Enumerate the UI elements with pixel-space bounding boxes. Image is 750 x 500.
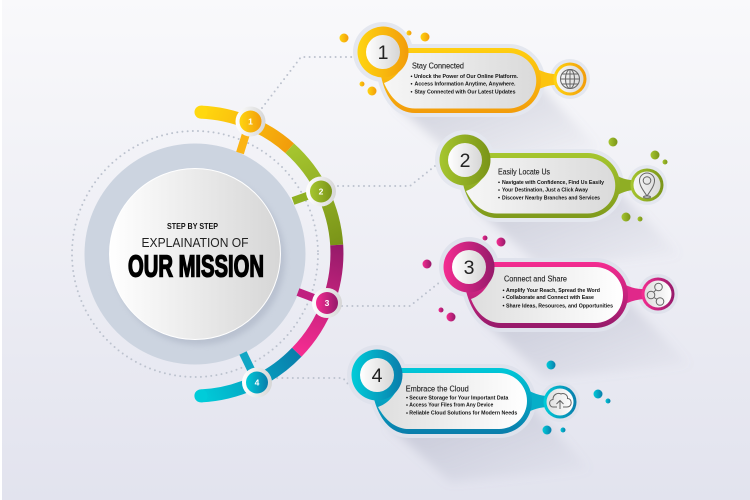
card 4 bullets: Reliable Cloud Solutions for Modern Needs bbox=[409, 411, 517, 417]
card 1 number badge: 1 bbox=[378, 42, 388, 64]
card 4 bullets: Access Your Files from Any Device bbox=[409, 403, 493, 409]
card 2 pill body bbox=[466, 158, 615, 214]
card 4 halo bbox=[347, 345, 590, 482]
icon: cloud upload bbox=[544, 386, 576, 418]
card 1 number badge bbox=[358, 26, 408, 78]
arc badge 3: 3 bbox=[325, 298, 330, 308]
icon: share bbox=[642, 278, 674, 310]
card 1 title: Stay Connected bbox=[412, 62, 464, 71]
card 1 bullets bbox=[411, 74, 518, 96]
card 3 halo bbox=[439, 237, 690, 378]
arc badge 4: 4 bbox=[255, 378, 260, 388]
card 2 number badge: 2 bbox=[460, 150, 470, 172]
card 2 title: Easily Locate Us bbox=[498, 168, 550, 177]
card 4 bullets bbox=[406, 395, 517, 417]
dotted connector lines bbox=[72, 57, 440, 396]
card 1 pill body bbox=[384, 53, 536, 108]
card 2 bullets bbox=[498, 180, 604, 201]
card 3 bullets: Amplify Your Reach, Spread the Word bbox=[506, 288, 600, 294]
hub heading: explaination of: EXPLAINATION OF bbox=[142, 236, 249, 250]
card 2 bullets: Navigate with Confidence, Find Us Easily bbox=[502, 180, 604, 186]
card 4 title: Embrace the Cloud bbox=[406, 385, 469, 394]
card 3 pill body bbox=[471, 267, 623, 323]
hub heading: step by step: STEP BY STEP bbox=[167, 221, 218, 231]
outer disc bbox=[84, 144, 306, 364]
arc connector spokes bbox=[240, 121, 327, 382]
card 1 pill bbox=[381, 48, 541, 113]
card 3 number badge: 3 bbox=[464, 257, 474, 279]
card 1 bullets: Stay Connected with Our Latest Updates bbox=[414, 90, 516, 96]
inner disc bbox=[110, 168, 280, 340]
card 1: stay connected bbox=[340, 22, 600, 162]
card 4 pill body bbox=[378, 373, 527, 429]
card 3 number badge bbox=[444, 242, 494, 292]
hub heading: our mission: OUR MISSION bbox=[128, 250, 264, 284]
card 4: embrace the cloud bbox=[347, 345, 610, 482]
card 2: easily locate us bbox=[435, 130, 680, 267]
card 3: connect and share bbox=[422, 236, 690, 378]
card 3 title: Connect and Share bbox=[504, 275, 568, 284]
card 1 bullets: Unlock the Power of Our Online Platform. bbox=[414, 74, 518, 80]
card 2 pill bbox=[463, 153, 620, 218]
segmented progress arc bbox=[201, 112, 337, 396]
arc badge 4 bbox=[242, 368, 272, 398]
card 2 bullets: Your Destination, Just a Click Away bbox=[502, 188, 588, 194]
card 4 number badge: 4 bbox=[372, 365, 383, 387]
central hub bbox=[84, 144, 306, 364]
card 3 bullets: Collaborate and Connect with Ease bbox=[506, 295, 594, 301]
card 1 halo bbox=[353, 22, 600, 162]
card 1 connector bbox=[533, 67, 558, 92]
arc badge 2 bbox=[306, 176, 336, 206]
decorative dots bbox=[340, 30, 430, 96]
card 4 connector bbox=[524, 388, 548, 414]
card 4 pill bbox=[374, 368, 532, 434]
icon: globe bbox=[554, 62, 586, 96]
card 2 halo bbox=[435, 130, 680, 267]
card 3 bullets bbox=[503, 288, 613, 309]
card 3 bullets: Share Ideas, Resources, and Opportunities bbox=[506, 303, 613, 309]
arc badge 3 bbox=[312, 288, 342, 318]
card 1 bullets: Access Information Anytime, Anywhere. bbox=[414, 82, 516, 88]
decorative dots bbox=[542, 360, 610, 434]
card 3 connector bbox=[620, 282, 646, 307]
decorative dots bbox=[422, 236, 506, 322]
icon: location pin bbox=[630, 168, 664, 202]
card 2 connector bbox=[612, 173, 635, 198]
card 4 number badge bbox=[352, 350, 402, 400]
inner disc shadow bbox=[113, 173, 285, 345]
card 3 pill bbox=[466, 262, 628, 328]
card 2 number badge bbox=[440, 134, 490, 186]
decorative dots bbox=[608, 138, 668, 222]
arc badge 1 bbox=[236, 106, 266, 136]
arc badge 1: 1 bbox=[248, 116, 253, 126]
arc badge 2: 2 bbox=[319, 186, 324, 196]
card 4 bullets: Secure Storage for Your Important Data bbox=[409, 395, 509, 401]
card 2 bullets: Discover Nearby Branches and Services bbox=[502, 195, 600, 201]
